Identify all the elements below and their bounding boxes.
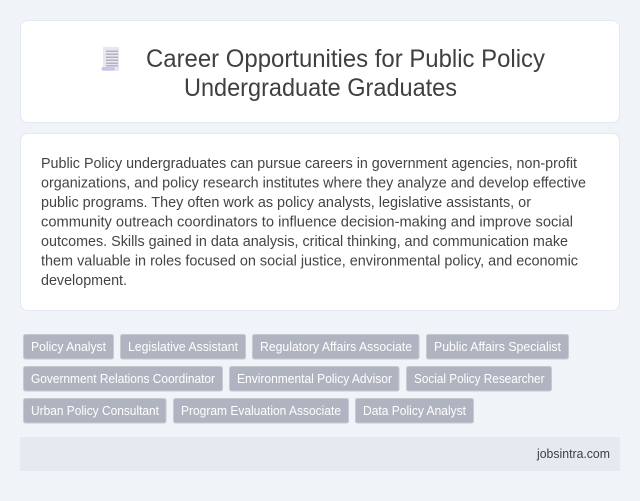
text block: description: community outreach coordinators to influence decision-making and improve social <box>41 214 573 230</box>
tag: Government Relations Coordinator <box>31 372 215 386</box>
tag <box>174 398 348 423</box>
panel: career tags <box>24 334 568 423</box>
tag: Urban Policy Consultant <box>31 404 159 418</box>
title: Undergraduate Graduates <box>184 74 457 102</box>
icon: document <box>102 47 119 71</box>
text block: description <box>41 156 586 289</box>
tag <box>426 334 568 359</box>
tag <box>252 334 419 359</box>
text block: description: them valuable in roles focused on social justice, environmental policy, and economic <box>41 254 578 270</box>
panel: description <box>20 134 620 310</box>
tag <box>120 334 246 359</box>
tag: Program Evaluation Associate <box>181 404 341 418</box>
text block: description: outcomes. Skills gained in data analysis, critical thinking, and communication make <box>41 234 568 250</box>
tag <box>24 366 222 391</box>
tag: Policy Analyst <box>31 340 106 354</box>
footer: jobsintra.com <box>536 447 610 461</box>
text block: description: Public Policy undergraduates can pursue careers in government agencies, non-profit <box>41 156 577 172</box>
tag <box>24 398 166 423</box>
tag: Public Affairs Specialist <box>434 340 561 354</box>
panel: header <box>20 20 620 122</box>
tag: Social Policy Researcher <box>414 372 544 386</box>
title: Career Opportunities for Public Policy <box>146 45 545 73</box>
text block: description: organizations, and policy research institutes where they analyze and develop effective <box>41 176 586 192</box>
text block: description: public programs. They often work as policy analysts, legislative assistants, or <box>41 195 531 211</box>
tag <box>230 366 399 391</box>
tag <box>356 398 474 423</box>
text block: description: development. <box>41 273 127 289</box>
tag <box>24 334 114 359</box>
tag: Legislative Assistant <box>128 340 238 354</box>
footer <box>20 437 620 471</box>
tag: Environmental Policy Advisor <box>237 372 392 386</box>
title <box>146 45 545 102</box>
tag: Regulatory Affairs Associate <box>260 340 412 354</box>
tag: Data Policy Analyst <box>363 404 466 418</box>
tag <box>406 366 552 391</box>
